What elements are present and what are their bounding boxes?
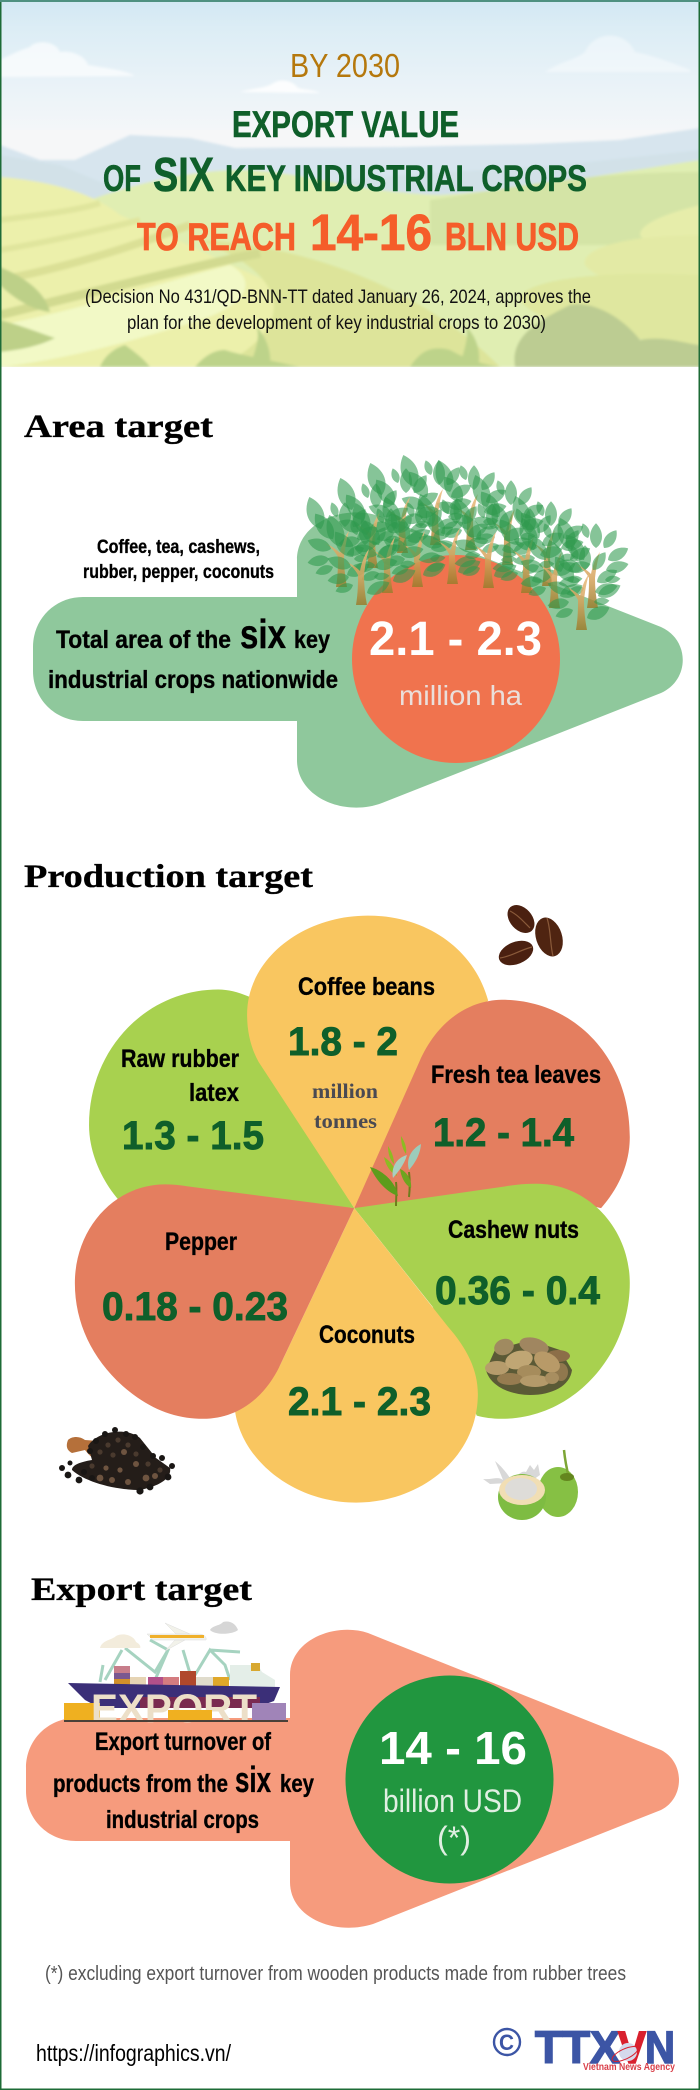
export description: Export turnover of <box>95 1728 272 1756</box>
area description: key <box>294 626 330 654</box>
footnote: (*) excluding export turnover from wooden products made from rubber trees <box>45 1963 626 1985</box>
area description: industrial crops nationwide <box>48 666 338 694</box>
heading: area target: Area target <box>24 409 213 445</box>
area description: Total area of the <box>56 626 231 654</box>
area description <box>48 611 338 694</box>
logo: TTXVN: TTX <box>535 2022 620 2073</box>
title line: by 2030: BY 2030 <box>290 47 400 84</box>
title line: export value: EXPORT VALUE <box>232 104 459 145</box>
title line: to reach 14-16 bln usd: 14-16 <box>310 204 432 261</box>
petal: pepper <box>102 1228 288 1329</box>
source url: https://infographics.vn/ <box>36 2040 232 2066</box>
trains <box>64 1703 100 1721</box>
icon: cashew nuts <box>485 1334 572 1395</box>
title line: to reach 14-16 bln usd: TO REACH <box>137 216 296 259</box>
petal: fresh tea leaves <box>431 1061 601 1155</box>
export description: products from the <box>53 1770 228 1798</box>
containers <box>114 1666 130 1673</box>
petal: cashew nuts <box>435 1216 601 1313</box>
petals <box>75 916 630 1503</box>
logo: TTXVN <box>494 2022 675 2073</box>
decision note <box>85 286 591 334</box>
area value: 2.1 - 2.3 <box>369 613 542 666</box>
export description <box>53 1728 314 1834</box>
export value: 14 - 16 <box>379 1722 527 1774</box>
logo: TTXVN: Vietnam News Agency <box>583 2061 675 2073</box>
truck <box>168 1710 212 1721</box>
icon: coconut <box>483 1450 578 1520</box>
ship bridge <box>230 1665 275 1690</box>
petal: coconuts: Coconuts <box>319 1321 415 1349</box>
title line: to reach 14-16 bln usd: BLN USD <box>445 216 579 259</box>
area description: six <box>240 611 286 657</box>
panel: export target <box>26 1621 679 1928</box>
export unit: billion USD <box>383 1783 522 1819</box>
title <box>103 47 587 261</box>
footnote marker: (*) <box>437 1820 471 1856</box>
petal: raw rubber latex: 1.3 - 1.5 <box>122 1114 264 1158</box>
value circle <box>346 1676 554 1884</box>
cranes <box>100 1640 240 1682</box>
export description: six <box>235 1759 271 1800</box>
panel: area target <box>33 452 683 808</box>
title line: six key industrial crops: OF <box>103 158 141 199</box>
scene word: EXPORT <box>91 1687 257 1731</box>
logo: TTXVN: V <box>618 2022 646 2073</box>
clouds <box>100 1634 140 1648</box>
petal: coffee beans: Coffee beans <box>298 973 435 1001</box>
unit: million tonnes: million <box>312 1079 378 1103</box>
decision note: (Decision No 431/QD-BNN-TT dated January 26, 2024, approves the <box>85 286 591 308</box>
crop list <box>83 536 274 583</box>
icon: tea leaves <box>370 1136 421 1206</box>
icon: export port scene <box>64 1621 288 1731</box>
petal: cashew nuts: Cashew nuts <box>448 1216 579 1244</box>
petal: coconuts: 2.1 - 2.3 <box>288 1380 431 1424</box>
crop list: rubber, pepper, coconuts <box>83 561 274 583</box>
petal: cashew nuts: 0.36 - 0.4 <box>435 1269 601 1313</box>
title line: six key industrial crops: SIX <box>153 149 214 202</box>
logo: TTXVN: C <box>499 2030 514 2055</box>
petal: pepper: 0.18 - 0.23 <box>102 1285 288 1329</box>
header background: rice terraces landscape <box>0 0 700 367</box>
hull <box>68 1683 280 1708</box>
petal: coffee beans <box>288 973 435 1064</box>
plane <box>147 1623 206 1651</box>
title line: six key industrial crops: KEY INDUSTRIAL CROPS <box>225 158 587 199</box>
arrow shape <box>33 512 683 808</box>
icon: pepper <box>59 1427 175 1495</box>
petal: raw rubber latex: latex <box>189 1079 239 1107</box>
petal: coffee beans: 1.8 - 2 <box>288 1020 398 1064</box>
unit: million tonnes <box>312 1079 378 1133</box>
decision note: plan for the development of key industrial crops to 2030) <box>127 312 546 334</box>
petal: coconuts <box>288 1321 431 1424</box>
icon: trees <box>302 452 631 630</box>
area unit: million ha <box>399 680 522 711</box>
heading: production target: Production target <box>24 859 313 895</box>
petal: fresh tea leaves: Fresh tea leaves <box>431 1061 601 1089</box>
petal: pepper: Pepper <box>165 1228 237 1256</box>
petal: raw rubber latex <box>121 1045 264 1158</box>
chart: production flower <box>75 916 630 1503</box>
crop list: Coffee, tea, cashews, <box>97 536 260 558</box>
export description: industrial crops <box>106 1806 259 1834</box>
petal: raw rubber latex: Raw rubber <box>121 1045 239 1073</box>
petal: fresh tea leaves: 1.2 - 1.4 <box>433 1111 575 1155</box>
export description: key <box>280 1770 314 1798</box>
value circle <box>352 555 560 763</box>
arrow shape <box>26 1630 679 1928</box>
icon: coffee beans <box>495 900 568 970</box>
heading: export target: Export target <box>31 1572 252 1608</box>
logo: TTXVN: N <box>645 2022 675 2073</box>
unit: million tonnes: tonnes <box>314 1109 377 1133</box>
